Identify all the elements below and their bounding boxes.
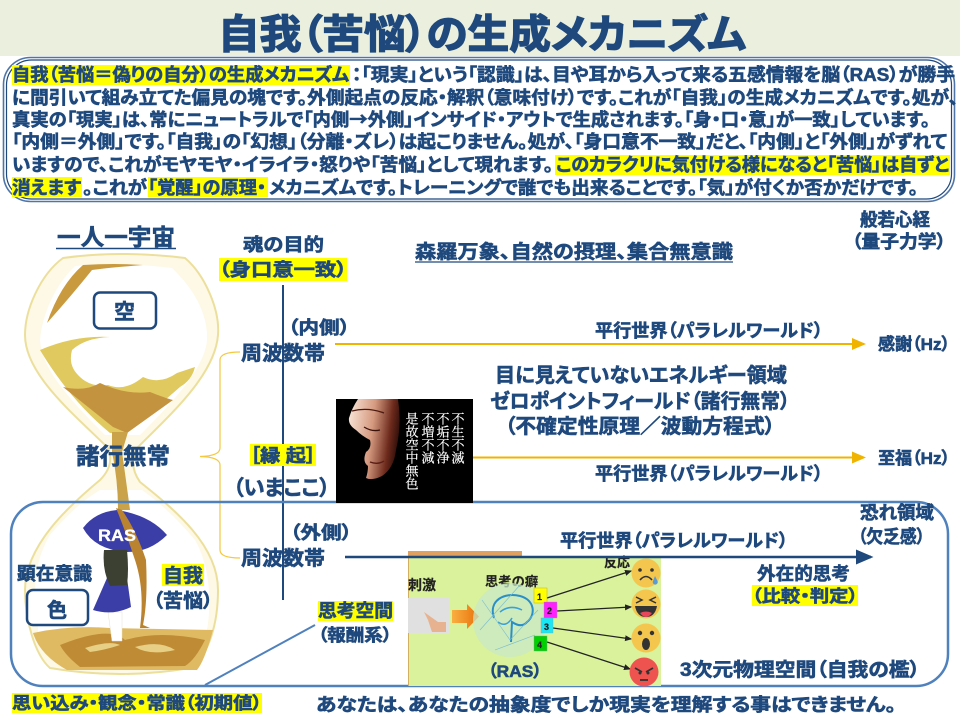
text block: energy field xyxy=(490,364,790,438)
arrow: orange xyxy=(452,604,479,629)
box: 空: 空 xyxy=(114,301,135,324)
arrow: outer frequency timeline xyxy=(345,556,871,558)
panel: explanation text box: 自我（苦悩＝偽りの自分）の生成メカニズム xyxy=(12,64,350,85)
image: Buddha with sutra text xyxy=(336,399,473,503)
habit box 1 xyxy=(534,588,547,603)
label: 平行世界 middle: 平行世界（パラレルワールド） xyxy=(595,464,823,484)
habit box 1: 1 xyxy=(537,592,542,602)
footer statement: あなたは、あなたの抽象度でしか現実を理解する事はできません。 xyxy=(316,695,896,715)
label: 身口意一致: （身口意一致） xyxy=(219,260,347,280)
icon: surprised face xyxy=(632,624,660,652)
arrow: inner frequency timeline xyxy=(335,343,864,345)
illustration: girl with umbrella xyxy=(83,508,167,641)
label: 周波数帯 lower: 周波数帯 xyxy=(241,547,325,570)
icon: laughing face xyxy=(632,590,660,618)
label: 比較判定: （比較・判定） xyxy=(752,587,858,606)
icon: angry face xyxy=(630,658,658,686)
box: 空 xyxy=(94,292,156,328)
label: 内側: （内側） xyxy=(288,318,350,338)
habit box 3: 3 xyxy=(544,622,549,632)
label: 欠乏感: （欠乏感） xyxy=(858,526,925,547)
image: Buddha with sutra text: 不生不滅 xyxy=(448,412,468,465)
panel: explanation text box xyxy=(4,58,958,202)
bracket: 諸行無常 brace xyxy=(200,352,240,558)
panel: explanation text box: 真実の「現実」は、常にニュートラルで「内側 →外側」インサイド・アウトで生成されます。「身・口・意」が一致」しています。 xyxy=(12,106,930,132)
panel: explanation text box: に間引いて組み立てた偏見の塊です。外側起点の反応・解釈（意味付け）です。これが「自我」の生成メカニズムです。処が、 xyxy=(12,87,958,108)
label: 自我: 自我 xyxy=(163,565,203,587)
panel: explanation text box: ：「現実」という「認識」は、目や耳から入って来る五感情報を脳（RAS）が勝手 xyxy=(352,64,955,85)
habit box 3 xyxy=(541,618,553,633)
icon: brain network xyxy=(473,583,547,657)
pointer line to 思考空間 xyxy=(205,625,315,685)
label: 魂の目的: 魂の目的 xyxy=(243,235,324,255)
arrows: habits to reactions xyxy=(547,571,631,669)
label: 恐れ領域: 恐れ領域 xyxy=(860,503,934,523)
label: 思考の癖: 思考の癖 xyxy=(485,574,538,589)
title band xyxy=(0,0,960,56)
panel: explanation text box: メカニズムです。トレーニングで誰でも出来ることです。「気」が付くか否かだけです。 xyxy=(269,177,918,198)
photo: finger on switch xyxy=(408,598,449,633)
panel: explanation text box: 「覚醒」の原理・ xyxy=(148,178,266,198)
label: 縁起: ［縁 起］ xyxy=(250,446,316,466)
label: 諸行無常: 諸行無常 xyxy=(76,443,170,469)
illustration: hourglass xyxy=(25,254,218,674)
label: 顕在意識: 顕在意識 xyxy=(17,564,92,584)
label: 刺激: 刺激 xyxy=(408,577,436,593)
label: 苦悩: （苦悩） xyxy=(153,590,213,612)
title: 自我（苦悩）の生成メカニズム xyxy=(218,13,746,57)
habit box 4: 4 xyxy=(537,640,542,650)
heading: 一人一宇宙: 一人一宇宙 xyxy=(57,224,175,250)
label: 至福: 至福（Hz） xyxy=(878,449,950,468)
label: 外在的思考: 外在的思考 xyxy=(757,564,850,584)
habit box 2: 2 xyxy=(547,606,552,616)
panel: explanation text box: いますので、これがモヤモヤ・イライラ・怒りや「苦悩」として現れます。 xyxy=(12,154,553,175)
vertical axis line xyxy=(282,285,284,600)
box: 色: 色 xyxy=(47,599,67,622)
label: 初期値: 思い込み・観念・常識（初期値） xyxy=(12,693,262,713)
text block: energy field: ゼロポイントフィールド（諸行無常） xyxy=(490,389,790,413)
panel: explanation text box: 。これが xyxy=(83,177,147,198)
label: RAS: （RAS） xyxy=(488,662,542,681)
habit box 2 xyxy=(544,602,557,618)
arrow: present timeline xyxy=(473,456,864,458)
label: 周波数帯 upper: 周波数帯 xyxy=(241,342,325,365)
label: 反応: 反応 xyxy=(604,555,630,570)
heading: 森羅万象: 森羅万象、自然の摂理、集合無意識 xyxy=(415,240,733,263)
text block: energy field: （不確定性原理／波動方程式） xyxy=(505,415,775,438)
label: 外側: （外側） xyxy=(290,523,352,543)
image: stimulus response diagram xyxy=(408,551,661,686)
image: Buddha with sutra text: 是故空中無色 xyxy=(402,412,422,490)
label: 量子力学: （量子力学） xyxy=(852,231,946,252)
label: RAS: RAS xyxy=(98,526,136,545)
panel: explanation text box: このカラクリに気付ける様になると「苦悩」は自ずと xyxy=(556,154,949,175)
text block: energy field: 目に見えていないエネルギー領域 xyxy=(495,364,787,387)
label: 平行世界 upper: 平行世界（パラレルワールド） xyxy=(595,321,823,341)
label: 平行世界 lower: 平行世界（パラレルワールド） xyxy=(560,531,788,551)
panel: explanation text box: 「内側＝外側」です。「自我」の「幻想」（分離・ズレ）は起こりません。処が、「身口意不一致」だと、「内側」と「外側」がずれて xyxy=(12,131,947,152)
habit box 4 xyxy=(534,636,547,651)
label: 般若心経: 般若心経 xyxy=(860,210,930,230)
box: 色 xyxy=(27,590,88,625)
label: 3次元物理空間: 3次元物理空間（自我の檻） xyxy=(680,659,920,681)
rounded frame: 3D physical space xyxy=(11,502,948,686)
label: 報酬系: （報酬系） xyxy=(318,626,392,645)
panel: explanation text box: 消えます xyxy=(12,178,81,198)
image: Buddha with sutra text: 不垢不浄 xyxy=(434,412,452,464)
label: 思考空間: 思考空間 xyxy=(318,601,393,621)
label: いまここ: （いまここ） xyxy=(233,477,330,500)
image: Buddha with sutra text: 不増不減 xyxy=(418,412,438,465)
icon: sad face xyxy=(632,558,660,588)
label: 感謝: 感謝（Hz） xyxy=(878,334,950,354)
